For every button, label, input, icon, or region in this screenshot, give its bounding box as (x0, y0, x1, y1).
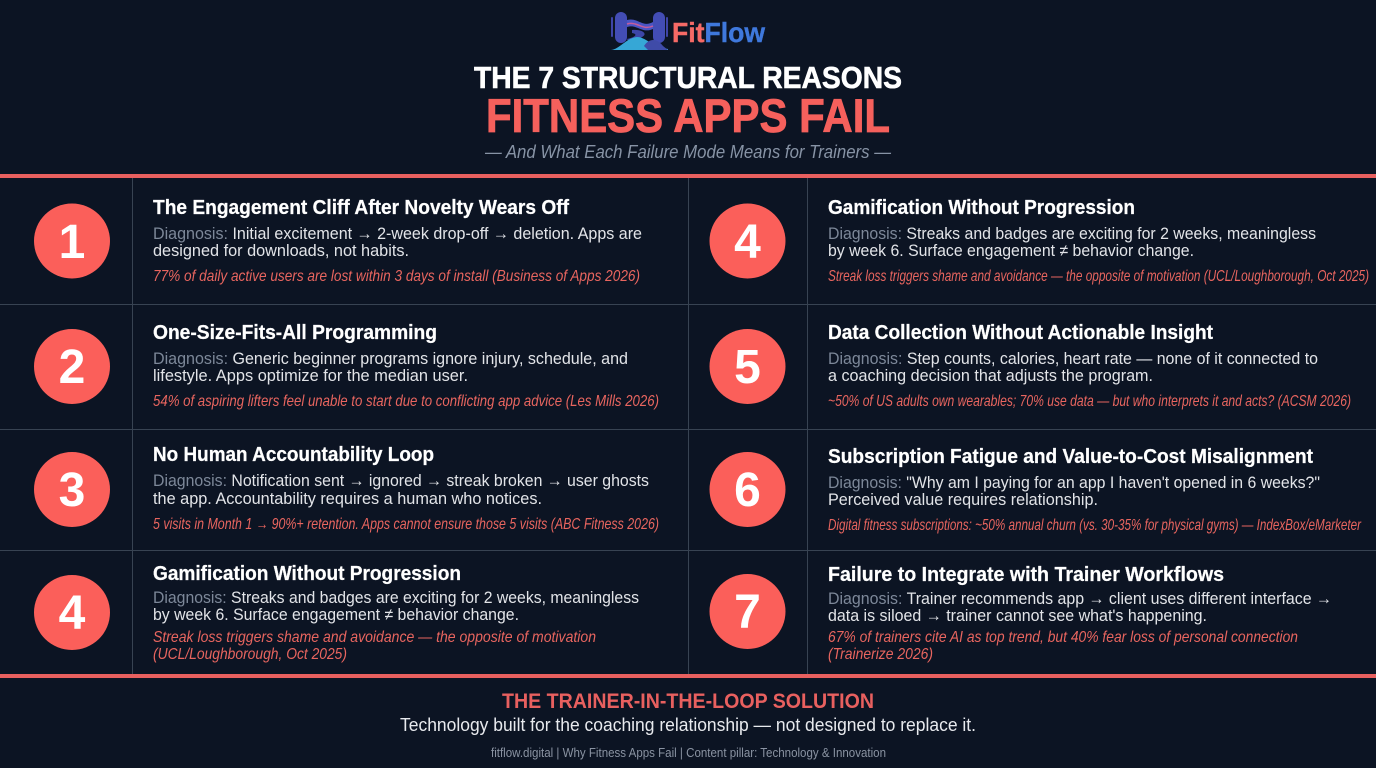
reason 2 statistic: 54% of aspiring lifters feel unable to start due to conflicting app advice (Les Mills 2026) (153, 393, 659, 410)
reason 5 heading: Data Collection Without Actionable Insight (828, 322, 1213, 344)
panel: reason 3 (34, 444, 659, 533)
badge 1 (34, 204, 110, 278)
badge 2 (34, 329, 110, 404)
title (474, 60, 902, 162)
reason 4 diagnosis: by week 6. Surface engagement ≠ behavior change. (828, 241, 1194, 260)
reason 4 diagnosis: by week 6. Surface engagement ≠ behavior change. (153, 605, 519, 624)
panel: reason 2 (34, 322, 659, 410)
reason 6 diagnosis: Diagnosis: "Why am I paying for an app I haven't opened in 6 weeks?" (828, 473, 1320, 492)
reason 3 heading: No Human Accountability Loop (153, 444, 434, 466)
icon: dumbbell and waves (611, 12, 668, 50)
badge 3 (34, 452, 110, 527)
reason 5 diagnosis (828, 349, 1318, 385)
badge 4 (34, 575, 110, 650)
reason 4 diagnosis: Diagnosis: Streaks and badges are exciting for 2 weeks, meaningless (828, 224, 1316, 243)
reason 3 diagnosis: the app. Accountability requires a human who notices. (153, 489, 542, 508)
badge 7: 7 (734, 586, 761, 639)
reason 2 heading: One-Size-Fits-All Programming (153, 322, 437, 344)
reason 4 diagnosis: Diagnosis: Streaks and badges are exciting for 2 weeks, meaningless (153, 588, 639, 607)
reason 3 diagnosis (153, 471, 649, 508)
badge 3: 3 (59, 464, 85, 517)
reason 6 diagnosis (828, 473, 1320, 509)
reason 3 statistic: 5 visits in Month 1 → 90%+ retention. Apps cannot ensure those 5 visits (ABC Fitness 2026) (153, 516, 659, 533)
panel: reason 1 (34, 197, 642, 285)
badge 4 (710, 204, 786, 278)
panel: reason 7 (710, 564, 1332, 663)
badge 6: 6 (734, 464, 761, 517)
grid lines (0, 178, 1376, 674)
solution tagline: Technology built for the coaching relationship — not designed to replace it. (400, 715, 976, 735)
subtitle: — And What Each Failure Mode Means for Trainers — (484, 141, 891, 162)
reason 7 diagnosis: data is siloed → trainer cannot see what's happening. (828, 606, 1207, 625)
badge 5 (710, 329, 786, 404)
badge 2: 2 (59, 341, 85, 394)
panel: reason 4 (left) (34, 563, 639, 663)
reason 7 diagnosis: Diagnosis: Trainer recommends app → client uses different interface → (828, 589, 1332, 608)
reason 1 diagnosis: designed for downloads, not habits. (153, 241, 409, 260)
footer (400, 690, 976, 760)
badge 4: 4 (734, 216, 761, 269)
reason 1 heading: The Engagement Cliff After Novelty Wears Off (153, 197, 569, 219)
badge 1: 1 (59, 216, 85, 269)
reason 2 diagnosis (153, 349, 628, 385)
badge 7 (710, 574, 786, 649)
badge 6 (710, 452, 786, 527)
reason 6 diagnosis: Perceived value requires relationship. (828, 490, 1098, 509)
reason 7 statistic: (Trainerize 2026) (828, 646, 933, 663)
reason 7 diagnosis (828, 589, 1332, 625)
reason 7 statistic (828, 629, 1298, 663)
reason 1 statistic: 77% of daily active users are lost within 3 days of install (Business of Apps 2026) (153, 268, 640, 285)
reason 1 diagnosis: Diagnosis: Initial excitement → 2-week drop-off → deletion. Apps are (153, 224, 642, 243)
logo: FitFlow (611, 12, 765, 50)
heading line 2: FITNESS APPS FAIL (486, 89, 890, 142)
reason 4 statistic: (UCL/Loughborough, Oct 2025) (153, 646, 347, 663)
badge 5: 5 (734, 341, 761, 394)
reason 3 diagnosis: Diagnosis: Notification sent → ignored → streak broken → user ghosts (153, 471, 649, 490)
reason 2 diagnosis: lifestyle. Apps optimize for the median user. (153, 366, 468, 385)
reason 6 heading: Subscription Fatigue and Value-to-Cost Misalignment (828, 446, 1313, 468)
solution heading: THE TRAINER-IN-THE-LOOP SOLUTION (502, 690, 874, 713)
panel: reason 4 (right) (710, 197, 1369, 285)
wordmark: FitFlow (672, 17, 765, 48)
reason 4 heading: Gamification Without Progression (828, 197, 1135, 219)
source line: fitflow.digital | Why Fitness Apps Fail | Content pillar: Technology & Innovation (491, 746, 886, 760)
reason 4 statistic: Streak loss triggers shame and avoidance — the opposite of motivation (153, 629, 596, 646)
reason 1 diagnosis (153, 224, 642, 260)
reason 7 heading: Failure to Integrate with Trainer Workflows (828, 564, 1224, 586)
panel: reason 6 (710, 446, 1361, 534)
reason 4 diagnosis (153, 588, 639, 624)
reason 7 statistic: 67% of trainers cite AI as top trend, but 40% fear loss of personal connection (828, 629, 1298, 646)
panel: reason 5 (710, 322, 1351, 410)
reason 2 diagnosis: Diagnosis: Generic beginner programs ignore injury, schedule, and (153, 349, 628, 368)
heading line 1: THE 7 STRUCTURAL REASONS (474, 60, 902, 95)
reason 5 diagnosis: a coaching decision that adjusts the program. (828, 366, 1153, 385)
reason 5 diagnosis: Diagnosis: Step counts, calories, heart rate — none of it connected to (828, 349, 1318, 368)
reason 4 diagnosis (828, 224, 1316, 260)
reason 4 heading: Gamification Without Progression (153, 563, 461, 585)
badge 4: 4 (59, 587, 86, 640)
reason 4 statistic (153, 629, 596, 663)
